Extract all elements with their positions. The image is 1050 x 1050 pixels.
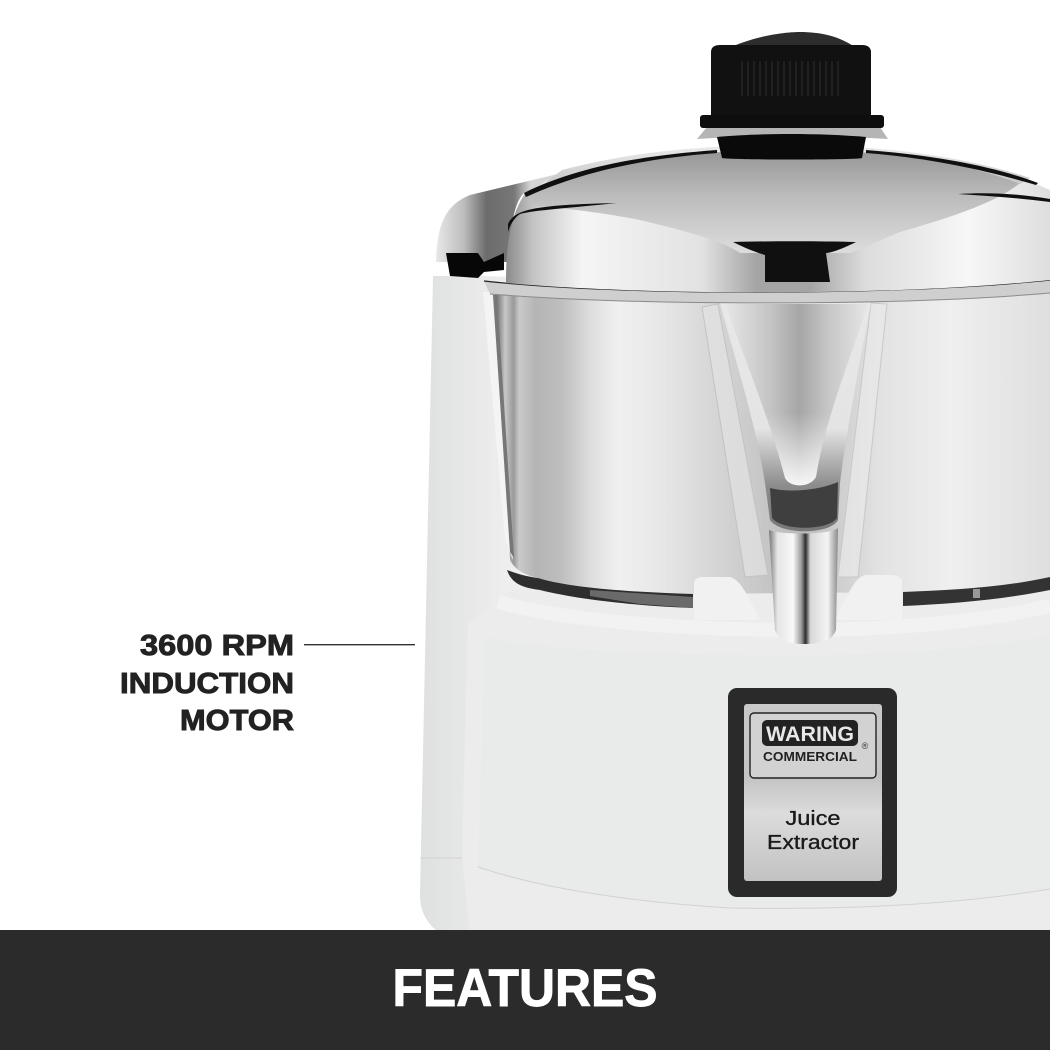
callout: 3600 RPM induction motor xyxy=(120,630,294,737)
bowl bottom reflection band left xyxy=(507,570,693,608)
badge plate xyxy=(744,704,882,881)
juice chute xyxy=(720,303,871,531)
body: white housing xyxy=(420,276,1050,930)
WARING logo: WARING xyxy=(766,723,854,746)
registered mark: ® xyxy=(862,741,869,751)
COMMERCIAL wordmark: COMMERCIAL xyxy=(763,749,857,764)
Juice Extractor label: Extractor xyxy=(767,832,859,854)
Juice Extractor label xyxy=(767,808,859,854)
hinge arm xyxy=(436,173,562,278)
lid rim xyxy=(484,280,1050,303)
badge xyxy=(728,688,897,897)
callout: 3600 RPM induction motor: MOTOR xyxy=(180,705,294,737)
banner heading: FEATURES xyxy=(393,959,657,1018)
juicer product photo xyxy=(420,32,1050,930)
lid knob xyxy=(697,32,888,160)
logo box xyxy=(750,713,876,778)
stainless bowl xyxy=(483,292,1050,608)
bowl bottom reflection band right xyxy=(903,577,1050,606)
knob collar xyxy=(697,127,888,139)
callout leader line xyxy=(304,644,415,645)
knob body xyxy=(711,45,871,115)
knob flange xyxy=(700,115,884,128)
bottom banner xyxy=(0,930,1050,1050)
white tabs at chute base xyxy=(694,575,902,620)
callout: 3600 RPM induction motor: 3600 RPM xyxy=(140,630,294,662)
Juice Extractor label: Juice xyxy=(786,808,840,830)
stainless lid xyxy=(506,144,1050,292)
spout tube xyxy=(769,528,838,644)
knob dome xyxy=(729,32,856,48)
lid dark reflections xyxy=(508,150,1050,282)
callout: 3600 RPM induction motor: INDUCTION xyxy=(120,668,294,700)
clear guards beside chute xyxy=(702,303,887,577)
